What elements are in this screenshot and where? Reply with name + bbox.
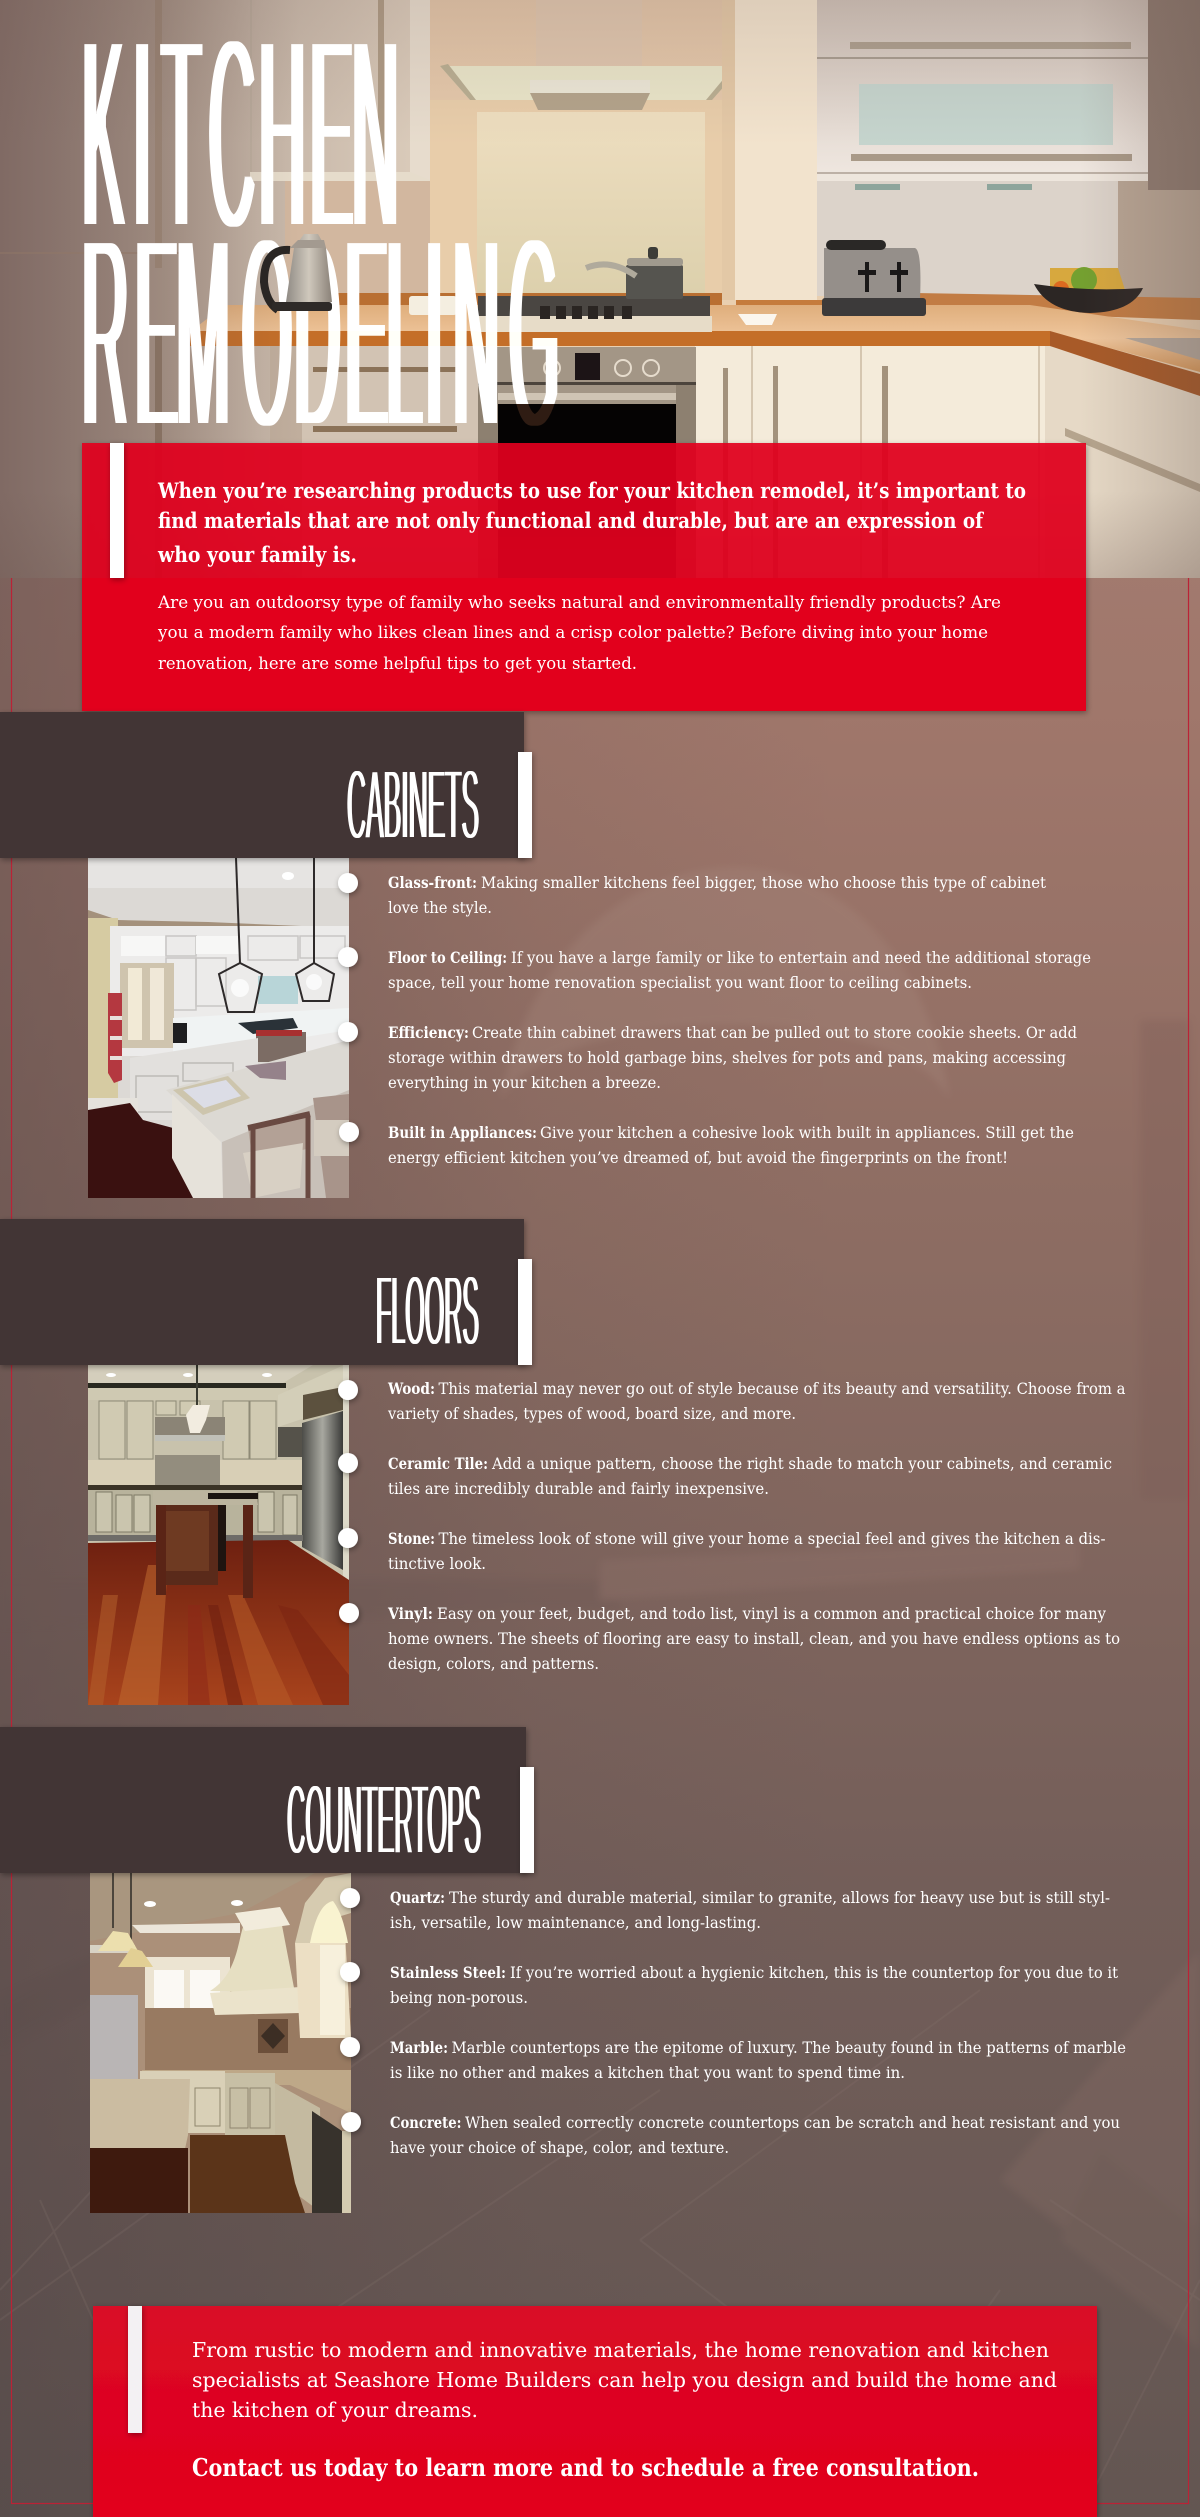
intro paragraph: Are you an outdoorsy type of family who seeks natural and environmentally friendly products? Are — [157, 593, 1001, 612]
item: efficiency: Create thin cabinet drawers that can be pulled out to store cookie sheets. Or add — [472, 1024, 1077, 1042]
item: built in appliances: energy efficient kitchen you’ve dreamed of, but avoid the fingerprints on the front! — [388, 1149, 1008, 1167]
item: stone: tinctive look. — [388, 1555, 486, 1573]
intro paragraph: you a modern family who likes clean lines and a crisp color palette? Before diving into your home — [157, 623, 988, 642]
section banner — [0, 1727, 534, 1876]
item: marble — [340, 2037, 1126, 2082]
title — [82, 0, 559, 487]
item: built in appliances: Give your kitchen a cohesive look with built in appliances. Still get the — [540, 1124, 1074, 1142]
item: quartz — [340, 1888, 1110, 1932]
panel: cabinets — [0, 712, 1091, 1167]
item: stone: Stone: — [388, 1529, 435, 1548]
item: efficiency: everything in your kitchen a breeze. — [388, 1074, 661, 1092]
section banner — [0, 712, 532, 861]
item: vinyl: Easy on your feet, budget, and todo list, vinyl is a common and practical choice for many — [437, 1605, 1106, 1623]
item: stone: The timeless look of stone will give your home a special feel and gives the kitchen a dis- — [438, 1530, 1106, 1548]
item: efficiency: Efficiency: — [388, 1023, 469, 1042]
closing paragraph: specialists at Seashore Home Builders can help you design and build the home and — [192, 2368, 1057, 2392]
hob — [478, 296, 710, 318]
item: concrete — [341, 2112, 1120, 2157]
intro heading: who your family is. — [157, 542, 357, 567]
item: marble: is like no other and makes a kitchen that you want to spend time in. — [390, 2064, 905, 2082]
countertop — [310, 293, 722, 308]
section banner — [0, 1219, 532, 1367]
item: quartz: Quartz: — [390, 1888, 445, 1907]
intro heading: When you’re researching products to use for your kitchen remodel, it’s important to — [157, 478, 1026, 503]
pot — [586, 247, 683, 299]
intro paragraph: renovation, here are some helpful tips to get you started. — [158, 654, 637, 673]
item: vinyl — [339, 1603, 1120, 1673]
item: stainless steel: Stainless Steel: — [390, 1963, 506, 1982]
wall and chimney — [536, 0, 642, 70]
item: wood: variety of shades, types of wood, board size, and more. — [387, 1405, 796, 1423]
item: ceramic tile: Add a unique pattern, choose the right shade to match your cabinets, and ceramic — [491, 1455, 1112, 1473]
item: stone — [338, 1528, 1106, 1573]
item: marble: Marble: — [390, 2038, 448, 2057]
item: efficiency — [338, 1022, 1077, 1092]
dish and bowl — [409, 296, 457, 315]
panel: cabinets: CABINETS — [347, 749, 479, 861]
item: wood: Wood: — [387, 1379, 435, 1398]
item: glass-front — [338, 873, 1047, 917]
item: ceramic tile — [338, 1453, 1112, 1498]
closing paragraph: From rustic to modern and innovative materials, the home renovation and kitchen — [192, 2338, 1049, 2362]
item: built in appliances — [339, 1122, 1074, 1167]
hero vignette — [0, 0, 1200, 578]
oven — [478, 347, 696, 578]
right wall and cabinet — [817, 181, 1127, 296]
item: wood — [338, 1379, 1126, 1423]
item: vinyl: design, colors, and patterns. — [388, 1655, 599, 1673]
kettle — [264, 234, 332, 311]
hood — [440, 66, 742, 100]
item: quartz: The sturdy and durable material, similar to granite, allows for heavy use but is still styl- — [449, 1889, 1110, 1907]
item: concrete: have your choice of shape, color, and texture. — [390, 2139, 729, 2157]
panel: intro — [82, 443, 1086, 711]
closing paragraph: the kitchen of your dreams. — [192, 2398, 478, 2422]
panel: closing call to action — [93, 2306, 1097, 2517]
hero kitchen photo — [0, 0, 1200, 578]
pillar — [722, 0, 736, 300]
lower cabinets — [300, 345, 480, 578]
toaster — [822, 240, 926, 316]
intro paragraph — [157, 593, 1001, 673]
item: concrete: Concrete: — [390, 2113, 462, 2132]
title: REMODELING — [82, 180, 559, 487]
photo: white kitchen with pendants — [88, 858, 349, 1198]
closing paragraph — [192, 2338, 1057, 2422]
photo: wood floor kitchen — [88, 1365, 349, 1705]
intro heading — [157, 478, 1026, 567]
item: built in appliances: Built in Appliances: — [388, 1123, 537, 1142]
item: wood: This material may never go out of style because of its beauty and versatility. Choose from a — [438, 1380, 1126, 1398]
item: glass-front: love the style. — [388, 899, 492, 917]
item: concrete: When sealed correctly concrete countertops can be scratch and heat resistant and you — [465, 2114, 1120, 2132]
item: floor to ceiling — [338, 947, 1091, 992]
item: stainless steel — [340, 1962, 1119, 2007]
item: floor to ceiling: If you have a large family or like to entertain and need the additional storage — [511, 949, 1091, 967]
item: marble: Marble countertops are the epitome of luxury. The beauty found in the patterns of marble — [452, 2039, 1126, 2057]
item: glass-front: Making smaller kitchens feel bigger, those who choose this type of cabinet — [481, 874, 1047, 892]
photo: cream cabinet kitchen — [90, 1873, 351, 2213]
item: ceramic tile: Ceramic Tile: — [388, 1454, 488, 1473]
item: vinyl: Vinyl: — [387, 1604, 433, 1623]
panel: floors — [0, 1219, 1126, 1673]
contact call: Contact us today to learn more and to schedule a free consultation. — [192, 2453, 979, 2482]
item: glass-front: Glass-front: — [388, 873, 477, 892]
backsplash — [477, 112, 705, 297]
panel: countertops: COUNTERTOPS — [287, 1764, 481, 1876]
item: quartz: ish, versatile, low maintenance, and long-lasting. — [390, 1914, 761, 1932]
panel: countertops — [0, 1727, 1126, 2157]
page border line — [12, 578, 1188, 2504]
item: floor to ceiling: space, tell your home renovation specialist you want floor to ceiling cabinets. — [388, 974, 972, 992]
item: stainless steel: being non-porous. — [390, 1989, 528, 2007]
item: stainless steel: If you’re worried about a hygienic kitchen, this is the countertop for you due to it — [510, 1964, 1119, 1982]
item: ceramic tile: tiles are incredibly durable and fairly inexpensive. — [388, 1480, 769, 1498]
item: efficiency: storage within drawers to hold garbage bins, shelves for pots and pans, making accessing — [388, 1049, 1066, 1067]
panel: floors: FLOORS — [376, 1255, 479, 1367]
intro heading: find materials that are not only functional and durable, but are an expression of — [158, 508, 985, 533]
fruit bowl — [1034, 267, 1143, 313]
left tall cabinets — [0, 0, 430, 578]
item: floor to ceiling: Floor to Ceiling: — [388, 948, 507, 967]
item: vinyl: home owners. The sheets of flooring are easy to install, clean, and you have endless options as to — [388, 1630, 1120, 1648]
